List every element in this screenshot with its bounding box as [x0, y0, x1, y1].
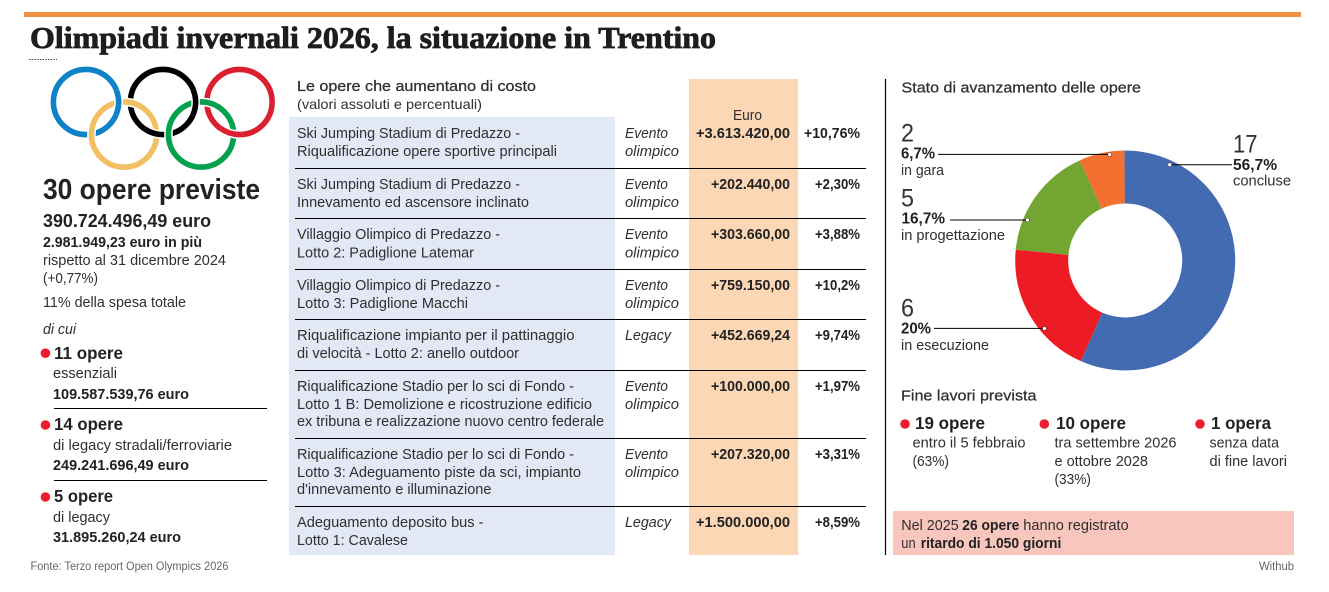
item: 14 opere	[41, 414, 232, 474]
row 4: +759.150,00	[711, 278, 790, 294]
row 2: Innevamento ed ascensore inclinato	[297, 195, 529, 211]
table heading: Le opere che aumentano di costo	[297, 78, 536, 95]
row 3: Villaggio Olimpico di Predazzo -	[297, 227, 500, 243]
row 7: Lotto 3: Adeguamento piste da sci, impianto	[297, 465, 581, 481]
row 4: Lotto 3: Padiglione Macchi	[297, 296, 468, 312]
item: 5 opere: 31.895.260,24 euro	[53, 530, 181, 546]
row 8: Legacy	[625, 515, 673, 531]
item: 1 opera: di fine lavori	[1210, 454, 1287, 470]
callout: delay box: 26 opere	[962, 518, 1019, 534]
item: 5 opere	[41, 486, 181, 546]
row 3: +3,88%	[815, 227, 860, 243]
item: 10 opere: e ottobre 2028	[1054, 454, 1148, 470]
item: 19 opere: entro il 5 febbraio	[912, 436, 1026, 452]
table name column background	[289, 117, 615, 555]
row 1: Evento	[625, 126, 668, 142]
row 7: +3,31%	[815, 447, 860, 463]
row 7: Evento	[625, 447, 668, 463]
increase text: (+0,77%)	[43, 271, 98, 287]
item: 11 opere: essenziali	[53, 366, 117, 382]
callout: in progettazione: 16,7%	[902, 210, 945, 227]
item: 14 opere: 249.241.696,49 euro	[53, 458, 189, 474]
table heading: (valori assoluti e percentuali)	[297, 96, 482, 112]
row 5: Legacy	[625, 328, 673, 344]
item: 10 opere: (33%)	[1054, 472, 1091, 488]
item: 5 opere: di legacy	[53, 510, 111, 526]
item: 1 opera: 1 opera	[1211, 413, 1271, 433]
item: 14 opere: 14 opere	[54, 414, 123, 434]
top accent bar	[24, 12, 1301, 17]
panel: overview totals	[41, 174, 267, 546]
callout: in progettazione: in progettazione	[901, 228, 1005, 244]
item: 1 opera: senza data	[1210, 436, 1280, 452]
row 4: +10,2%	[815, 278, 860, 294]
row 2: olimpico	[625, 195, 679, 211]
row 2	[297, 177, 860, 211]
callout: delay box	[893, 511, 1294, 555]
item: 1 opera	[1195, 413, 1287, 470]
credit: Withub	[1259, 561, 1294, 573]
item: 19 opere: 19 opere	[915, 413, 985, 433]
panel: cost increase table	[289, 78, 866, 555]
row 1: +10,76%	[804, 126, 860, 142]
item: 10 opere	[1040, 413, 1176, 488]
row 6: olimpico	[625, 397, 679, 413]
row 8	[297, 515, 860, 549]
increase text: 2.981.949,23 euro in più	[43, 234, 202, 251]
callout: delay box: hanno registrato	[1023, 518, 1129, 534]
row 5: di velocità - Lotto 2: anello outdoor	[297, 346, 519, 362]
row 1: olimpico	[625, 144, 679, 160]
callout: in progettazione: 5	[901, 185, 914, 213]
row 4	[297, 278, 860, 312]
donut chart	[1042, 177, 1209, 344]
row 4: olimpico	[625, 296, 679, 312]
increase text	[43, 234, 226, 287]
callout: concluse	[1168, 131, 1291, 190]
callout: in esecuzione	[901, 295, 1046, 354]
row 5: Riqualificazione impianto per il pattinaggio	[297, 328, 574, 344]
row 3: olimpico	[625, 246, 679, 262]
heading: stato di avanzamento: Stato di avanzamento delle opere	[902, 80, 1141, 97]
row 1: Ski Jumping Stadium di Predazzo -	[297, 126, 520, 142]
row 7: d'innevamento e illuminazione	[297, 482, 492, 498]
callout: in gara: 6,7%	[901, 145, 935, 162]
item: 5 opere: 5 opere	[54, 486, 113, 506]
callout: in gara: 2	[901, 120, 914, 148]
row 4: Evento	[625, 278, 668, 294]
row 8: +8,59%	[815, 515, 860, 531]
total amount: 390.724.496,49 euro	[43, 211, 211, 231]
row 7	[297, 447, 860, 498]
callout: in gara: in gara	[901, 163, 945, 179]
callout: delay box: ritardo di 1.050 giorni	[921, 536, 1061, 552]
heading: 30 opere previste: 30 opere previste	[43, 174, 260, 206]
callout: in esecuzione: in esecuzione	[901, 338, 989, 354]
increase text: rispetto al 31 dicembre 2024	[43, 253, 226, 269]
row 1: Riqualificazione opere sportive principali	[297, 144, 557, 160]
row 8: Adeguamento deposito bus -	[297, 515, 484, 531]
row 4: Villaggio Olimpico di Predazzo -	[297, 278, 500, 294]
row 6: +1,97%	[815, 379, 860, 395]
row 6: Lotto 1 B: Demolizione e ricostruzione edificio	[297, 397, 592, 413]
heading: fine lavori prevista: Fine lavori prevista	[901, 388, 1037, 405]
table euro column background	[689, 79, 798, 555]
row 5: +452.669,24	[711, 328, 791, 344]
row 6	[297, 379, 860, 430]
row 1	[297, 126, 860, 160]
row 7: +207.320,00	[711, 447, 790, 463]
share of total spending: 11% della spesa totale	[43, 295, 186, 311]
item: 11 opere	[41, 343, 189, 403]
row 2: Ski Jumping Stadium di Predazzo -	[297, 177, 520, 193]
source note: Fonte: Terzo report Open Olympics 2026	[30, 561, 228, 573]
icon: olympic rings	[53, 69, 272, 167]
callout: concluse: 56,7%	[1233, 157, 1277, 174]
row 2: Evento	[625, 177, 668, 193]
row 8: Lotto 1: Cavalese	[297, 533, 408, 549]
item: 11 opere: 11 opere	[54, 343, 123, 363]
row 3: Evento	[625, 227, 668, 243]
callout: concluse: concluse	[1233, 174, 1291, 190]
callout: delay box: un	[901, 536, 916, 552]
row 3: +303.660,00	[711, 227, 790, 243]
row 3: Lotto 2: Padiglione Latemar	[297, 246, 474, 262]
table heading	[297, 78, 536, 112]
row 6: Evento	[625, 379, 668, 395]
item: 19 opere	[900, 413, 1026, 470]
callout: in progettazione	[901, 185, 1030, 244]
row 3	[297, 227, 860, 262]
row 7: Riqualificazione Stadio per lo sci di Fondo -	[297, 447, 574, 463]
di cui label: di cui	[43, 322, 77, 338]
row 5: +9,74%	[815, 328, 860, 344]
row 8: +1.500.000,00	[696, 515, 790, 531]
item: 14 opere: di legacy stradali/ferroviarie	[53, 438, 232, 454]
row 6: Riqualificazione Stadio per lo sci di Fondo -	[297, 379, 574, 395]
title: Olimpiadi invernali 2026, la situazione in Trentino	[30, 20, 716, 55]
row 5	[297, 328, 860, 362]
row 7: olimpico	[625, 465, 679, 481]
panel: progress status	[901, 80, 1291, 354]
callout: in esecuzione: 20%	[901, 320, 931, 337]
item: 11 opere: 109.587.539,76 euro	[53, 387, 189, 403]
row 6: +100.000,00	[711, 379, 790, 395]
row 6: ex tribuna e realizzazione nuovo centro federale	[297, 414, 604, 430]
item: 19 opere: (63%)	[912, 454, 949, 470]
callout: in gara	[901, 120, 1112, 179]
column header: Euro: Euro	[733, 108, 762, 124]
row 2: +202.440,00	[711, 177, 790, 193]
callout: in esecuzione: 6	[901, 295, 914, 323]
item: 10 opere: tra settembre 2026	[1054, 436, 1176, 452]
row 2: +2,30%	[815, 177, 860, 193]
row 1: +3.613.420,00	[696, 126, 790, 142]
item: 10 opere: 10 opere	[1056, 413, 1126, 433]
callout: concluse: 17	[1233, 131, 1258, 159]
callout: delay box: Nel 2025	[901, 518, 959, 534]
panel: expected completion	[900, 388, 1287, 488]
